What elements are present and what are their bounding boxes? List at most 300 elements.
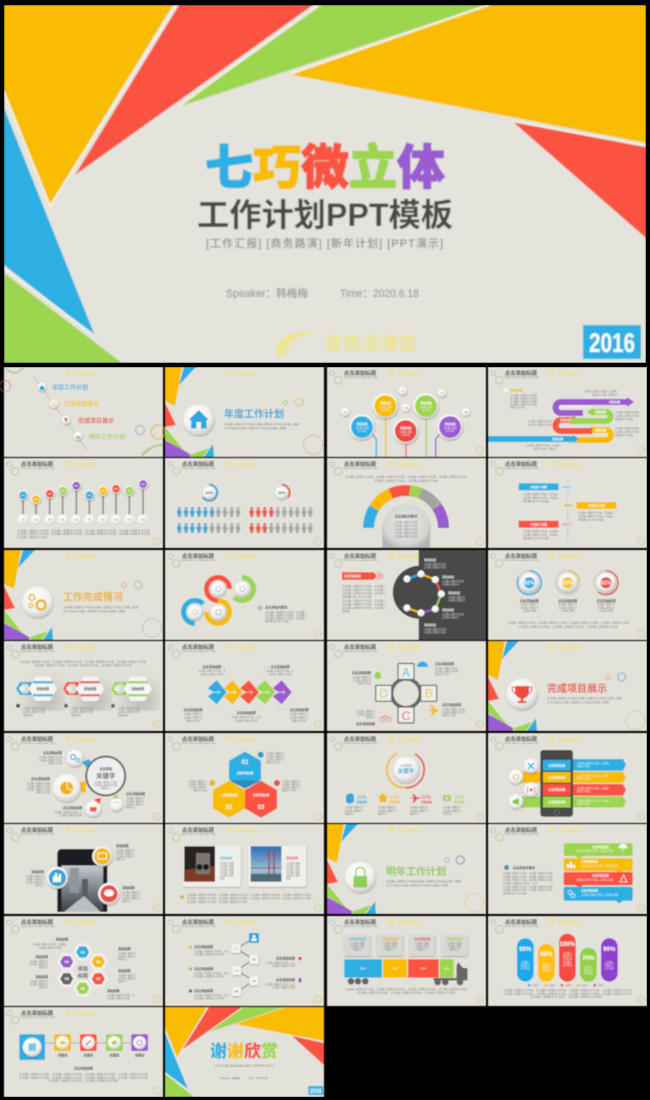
cargo blocks bbox=[344, 959, 454, 978]
chevron row bbox=[208, 680, 292, 704]
hexagon 03 bbox=[245, 781, 277, 818]
agenda item 3: 完成项目展示 bbox=[78, 417, 114, 425]
slide: chevrons: 变色龙课堂 bbox=[235, 644, 258, 651]
closing triangles bbox=[165, 1007, 324, 1097]
slide: arch gauge: 变色龙课堂 bbox=[397, 461, 420, 468]
right arrow bars: 简要文字内容 bbox=[577, 802, 591, 806]
phone: 点击添加标题 bbox=[548, 776, 565, 780]
slide: photo cards bbox=[165, 824, 324, 914]
slide: three hexagons bbox=[165, 733, 324, 823]
center disc: 点击添加关键词 bbox=[395, 514, 417, 518]
main title bbox=[205, 141, 445, 195]
captions: 简要文字内容 bbox=[48, 761, 63, 765]
ring 23%: 点击输入简要文字 bbox=[559, 605, 578, 609]
slide: timeline: Click here to add your title bbox=[505, 467, 539, 470]
captions bbox=[30, 936, 137, 1000]
capsule 100% red: 点击输入 bbox=[563, 951, 572, 955]
side captions: 点击输入简要文字内容 bbox=[528, 422, 553, 426]
month discs: 7月 bbox=[88, 518, 91, 522]
hexagon 02: 02 bbox=[226, 805, 233, 811]
callouts: 点击输入简要文字内容 bbox=[269, 672, 292, 676]
side captions: 简要文字内容，简要文字 bbox=[592, 392, 619, 396]
right labels bbox=[424, 557, 466, 634]
captions: 点击输入简要文字 bbox=[189, 782, 208, 786]
info cards: 简要文字 bbox=[417, 947, 427, 951]
capsule 100% red: 文字内容 bbox=[563, 957, 572, 961]
slide: swirl rings: 变色龙课堂 bbox=[235, 553, 258, 560]
bubble: blue: 添加标题 bbox=[356, 422, 368, 426]
main title: 微 bbox=[301, 142, 349, 195]
phone body bbox=[57, 849, 107, 912]
card: camera photo bbox=[183, 846, 241, 887]
hex center label: 标题 bbox=[78, 972, 89, 980]
captions: 点击输入简要文字 bbox=[30, 982, 49, 986]
captions: 点击添加标题 bbox=[356, 721, 376, 726]
stat: 16%: 16% bbox=[356, 795, 367, 801]
captions: 点击输入简要文字内容 bbox=[39, 755, 63, 759]
slide: keyword lens: Click here to add your title bbox=[21, 742, 55, 745]
section text bbox=[224, 422, 300, 430]
stat: 10%: 点击输入简要文字 bbox=[443, 808, 462, 812]
pins: 20% bbox=[34, 499, 38, 501]
arrow band: purple: 添加标题 bbox=[609, 400, 620, 404]
icon discs bbox=[509, 759, 538, 809]
slide: phone menu: 点击添加标题 bbox=[505, 735, 538, 743]
side captions: 点击输入简要文字内容 bbox=[615, 414, 640, 418]
captions: 点击输入简要文字 bbox=[118, 954, 137, 958]
bubble: purple: 添加标题 bbox=[444, 422, 456, 426]
cover: blue triangle bbox=[4, 108, 95, 336]
right arrow bars: 简要文字内容 bbox=[577, 789, 591, 793]
captions: 简要文字内容 bbox=[435, 672, 449, 676]
card: camera photo: 点击输入简要 bbox=[220, 861, 234, 865]
right labels: 点击输入简要文字 bbox=[442, 615, 460, 619]
captions: 点击输入简要文字 bbox=[282, 782, 301, 786]
colored hexes: 03 bbox=[96, 976, 101, 981]
left text: 点击输入简要文字内容，点击输入 bbox=[342, 598, 387, 602]
flow boxes: 03 bbox=[235, 968, 239, 972]
pins: 50% bbox=[141, 484, 145, 486]
bubble: red: 文字内容 bbox=[401, 432, 411, 436]
slide: agenda bbox=[0, 367, 165, 457]
slide: chevrons: 点击添加标题 bbox=[182, 643, 215, 651]
slide: capsule chart bbox=[488, 916, 647, 1006]
hex group 02: 添加标题 bbox=[84, 686, 97, 691]
ring 82%: 点击添加标题 bbox=[520, 598, 540, 603]
process tile: purple: 关键词 bbox=[135, 1052, 144, 1057]
slide: swirl rings: Click here to add your title bbox=[182, 559, 216, 562]
closing title: 赏 bbox=[261, 1041, 278, 1061]
slide: work completion section bbox=[4, 550, 163, 640]
info cards: 点击输入简要 bbox=[415, 944, 430, 948]
pins: 20% bbox=[101, 491, 105, 493]
captions: 添加标题 bbox=[122, 885, 136, 890]
ring 23%: 点击输入简要 bbox=[561, 609, 575, 613]
slide: timeline: 点击添加标题 bbox=[505, 460, 538, 468]
connectors bbox=[78, 759, 119, 804]
step captions: 点击添加标题 bbox=[276, 977, 296, 982]
body text bbox=[17, 528, 151, 539]
info cards: 点击输入简要 bbox=[350, 941, 365, 945]
callouts: 点击添加标题 bbox=[236, 710, 256, 715]
closing speaker bbox=[220, 1076, 269, 1080]
card: bridge photo: 点击输入简要 bbox=[286, 864, 300, 868]
capsule 70% green: 简要文字 bbox=[584, 968, 593, 972]
side captions: 简要文字内容，简要文字 bbox=[533, 446, 558, 450]
capsule 80% yellow bbox=[538, 944, 555, 982]
captions: 简要文字内容 bbox=[357, 681, 372, 685]
icon: gears bbox=[22, 587, 53, 618]
left text bbox=[342, 584, 387, 613]
dark panel bbox=[393, 550, 486, 640]
callouts: 点击输入简要文字内容 bbox=[200, 672, 224, 676]
process tile: red bbox=[80, 1034, 97, 1057]
pins: 30% bbox=[48, 494, 52, 496]
step captions: 点击输入简要文字内容，点击 bbox=[194, 993, 230, 997]
slide: people chart: Click here to add your title bbox=[182, 467, 216, 470]
right labels: 添加标题 bbox=[424, 557, 436, 562]
captions: 添加标题 bbox=[56, 936, 69, 942]
slide: phone photo: Click here to add your title bbox=[21, 833, 55, 836]
captions: 简要文字 bbox=[39, 965, 49, 969]
timeline item yellow: 点击输入标题 bbox=[588, 504, 605, 508]
agenda item 1: 年度工作计划 bbox=[52, 384, 88, 392]
slide: speech blocks: 变色龙课堂 bbox=[558, 827, 581, 834]
slide: hexagon tags: Click here to add your title bbox=[21, 650, 55, 653]
slide: truck chart bbox=[327, 916, 486, 1006]
footer text bbox=[507, 620, 630, 628]
captions: 点击添加标题 bbox=[442, 702, 462, 707]
slide: flow steps: 变色龙课堂 bbox=[235, 919, 258, 926]
tile D: D bbox=[379, 687, 388, 701]
slide: chevrons bbox=[165, 641, 324, 731]
step captions: 点击输入简要文字内容，点击 bbox=[194, 971, 230, 975]
slide: dark circle: Click here to add your title bbox=[344, 559, 378, 562]
captions: 点击输入简要文字内容，点 bbox=[107, 993, 135, 997]
captions bbox=[189, 751, 301, 792]
captions: 点击输入简要文字内容 bbox=[71, 706, 94, 710]
number tags bbox=[341, 387, 470, 416]
slide: flow steps: Click here to add your title bbox=[182, 925, 216, 928]
hex group 02 bbox=[63, 677, 104, 701]
tile B: B bbox=[425, 687, 433, 701]
closing title: 欣 bbox=[244, 1041, 261, 1061]
card: camera photo: 添加标题 bbox=[220, 855, 232, 860]
section text: 文字内容点击输入简要文字内容点击输入简要 bbox=[63, 609, 126, 613]
captions: 简要文字 bbox=[39, 985, 49, 989]
left text: 点击输入简要文字内容，点击输入简要文字内容 bbox=[503, 874, 553, 878]
donut 35% bbox=[274, 485, 290, 501]
slide: gauge with stats: 点击添加标题 bbox=[344, 735, 377, 743]
captions: 点击输入简要文字 bbox=[26, 880, 45, 884]
slide: gauge with stats: 变色龙课堂 bbox=[397, 736, 420, 743]
slide: project showcase section bbox=[488, 641, 647, 731]
captions: 点击输入简要文字内容 bbox=[59, 813, 83, 817]
hexagon 01: 点击添加标题 bbox=[237, 771, 254, 775]
colored hexes: 01 bbox=[80, 950, 86, 954]
flow boxes: 04 bbox=[252, 979, 256, 983]
flow boxes bbox=[232, 933, 259, 996]
captions: 点击输入简要文字内容 bbox=[442, 707, 466, 711]
ring 82%: 82% bbox=[524, 581, 535, 587]
bubble: green: 点击输入简要 bbox=[419, 404, 433, 408]
section text bbox=[386, 879, 462, 887]
lens: 点击输入简要文字内容 bbox=[94, 783, 118, 787]
captions: 添加标题 bbox=[116, 843, 130, 848]
stat: 10% bbox=[443, 795, 465, 816]
slide: dark circle: 点击添加标题 bbox=[344, 552, 377, 560]
captions: 添加标题 bbox=[35, 954, 49, 959]
main title: 巧 bbox=[253, 142, 301, 195]
closing title: 谢 bbox=[210, 1041, 227, 1061]
footer text bbox=[180, 893, 312, 903]
tile C bbox=[398, 707, 414, 723]
info cards: 点击输入简要 bbox=[447, 944, 462, 948]
stat: 10%: 10% bbox=[454, 795, 465, 801]
cargo blocks: 15% bbox=[392, 966, 398, 970]
process tile: green: 关键词 bbox=[110, 1052, 119, 1057]
footer text: 点击输入简要文字内容，点击输入简要文字内容，点击输入简要文字内容，点击输入简要文字内容 bbox=[503, 988, 633, 992]
gauge bbox=[387, 754, 424, 788]
cover: green triangle bbox=[178, 5, 486, 107]
bubble: purple bbox=[437, 414, 463, 440]
process tile: purple bbox=[131, 1034, 148, 1057]
pins: 50% bbox=[74, 486, 79, 488]
captions: 点击输入简要文字 bbox=[353, 678, 372, 682]
icon: cloud bbox=[417, 662, 428, 667]
closing speaker: Speaker：韩梅梅 bbox=[220, 1076, 241, 1080]
callouts: 简要文字内容 bbox=[292, 718, 307, 722]
captions: 点击输入简要文字内容 bbox=[27, 787, 51, 791]
captions: 点击输入简要文字 bbox=[30, 962, 49, 966]
ring 61% bbox=[594, 571, 618, 613]
captions: 点击输入简要文字 bbox=[30, 959, 49, 963]
stems bbox=[23, 486, 143, 516]
captions: 点击输入简要文字 bbox=[122, 896, 141, 900]
block: yellow: 点击输入简要文字内容，点击输入简要 bbox=[581, 864, 619, 868]
flow boxes: 02 bbox=[252, 958, 256, 962]
stat: 16% bbox=[345, 793, 368, 816]
slide: icon process: 变色龙课堂 bbox=[74, 1010, 97, 1017]
captions: 点击输入简要文字 bbox=[118, 973, 137, 977]
captions: 点击输入简要文字内容 bbox=[23, 710, 46, 714]
slide: gauge with stats bbox=[327, 733, 486, 823]
slide: keyword lens bbox=[4, 733, 163, 823]
timeline item yellow: 2020.02 bbox=[564, 506, 573, 508]
ring arcs bbox=[184, 577, 254, 624]
info cards: 简要文字 bbox=[353, 947, 363, 951]
bubble: blue bbox=[349, 414, 375, 440]
right labels: 点击输入简要文字 bbox=[448, 595, 466, 599]
slide: photo cards: 变色龙课堂 bbox=[235, 827, 258, 834]
text: upper left: 点击输入简要文字内容 bbox=[510, 393, 538, 397]
captions: 添加标题 bbox=[118, 946, 132, 951]
arrow band: green bbox=[570, 408, 610, 421]
center ring bbox=[392, 679, 420, 708]
top text: 点击输入简要文字内容，点击输入简要文字内容 bbox=[374, 478, 439, 482]
phone: 点击添加标题 bbox=[548, 764, 565, 768]
process tile: red: 关键词 bbox=[84, 1052, 93, 1057]
info cards: 点击输入简要 bbox=[383, 941, 398, 945]
hexagon 01 bbox=[229, 752, 261, 788]
section heading: 工作完成情况 bbox=[63, 591, 123, 604]
slide: three hexagons: 点击添加标题 bbox=[182, 735, 215, 743]
captions: 点击添加标题 bbox=[126, 791, 146, 796]
capsule 70% green bbox=[580, 948, 597, 982]
icon: lock bbox=[345, 862, 376, 893]
truck bbox=[348, 962, 468, 985]
slide: people chart bbox=[165, 458, 324, 548]
callouts: 点击添加标题 bbox=[270, 664, 290, 669]
cargo blocks: 10% bbox=[444, 966, 450, 970]
pins: 30% bbox=[114, 489, 118, 491]
capsule 100% red: 简要文字 bbox=[563, 954, 572, 958]
month discs: 1月 bbox=[21, 518, 25, 522]
text: upper left: 点击输入简要文字内容 bbox=[510, 396, 538, 400]
arrow band: blue: 添加标题 bbox=[552, 437, 563, 441]
side captions: 简要文字内容 bbox=[615, 417, 634, 421]
footer text bbox=[345, 987, 468, 995]
top text: 点击输入简要文字内容，点击输入简要文字内容，点击输入简要文字内容，点击输入简要文字内容 bbox=[345, 474, 468, 478]
slide: arch gauge bbox=[327, 458, 486, 548]
capsule 90% blue bbox=[517, 938, 534, 982]
slide: people chart: 变色龙课堂 bbox=[235, 461, 258, 468]
closing tags: [工作汇报] [商务路演] [新年计划] [PPT演示] bbox=[215, 1064, 273, 1068]
captions: 点击输入简要文字内容 bbox=[27, 781, 51, 785]
card: camera photo: 点击输入简要 bbox=[220, 873, 234, 877]
slide: hexagon tags: 点击添加标题 bbox=[21, 643, 54, 651]
center disc: 点击输入简要文字内容 bbox=[395, 527, 418, 531]
captions bbox=[26, 843, 141, 903]
arch segments bbox=[368, 490, 444, 528]
left text: 点击输入简要文字内容，点击输入简要文字内容 bbox=[503, 888, 553, 892]
stat: 12%: 点击输入简要文字 bbox=[378, 805, 397, 809]
captions: 简要文字内容 bbox=[442, 713, 456, 717]
step captions: 点击输入简要文字内容，点击 bbox=[265, 960, 296, 964]
card: bridge photo: 添加标题 bbox=[286, 855, 298, 860]
right arrow bars: 简要文字内容 bbox=[577, 764, 591, 768]
slide: speech blocks: Click here to add your title bbox=[505, 833, 539, 836]
body text: 点击输入简要文字内容，点击输入简要文字内容，点击输入简要文字内容，点击输入简要文字内容 bbox=[17, 528, 151, 532]
captions: 添加标题 bbox=[107, 988, 121, 993]
left text: 简要文字内容 bbox=[503, 891, 528, 895]
process tile: yellow bbox=[54, 1034, 71, 1057]
text: upper left: 点击输入简要文字内容 bbox=[510, 402, 538, 406]
tile B bbox=[421, 685, 437, 701]
slide: three rings: 点击添加标题 bbox=[505, 552, 538, 560]
ring 61%: 点击添加标题 bbox=[596, 598, 616, 603]
captions: 简要文字 bbox=[118, 979, 128, 983]
people: red rows bbox=[249, 507, 313, 533]
disc: yellow bbox=[92, 846, 113, 866]
arrow band: purple bbox=[556, 397, 634, 413]
slide: ABCD cross: 变色龙课堂 bbox=[397, 644, 420, 651]
captions: 点击输入简要文字 bbox=[189, 779, 208, 783]
timeline item yellow bbox=[560, 502, 616, 522]
agenda item 3 bbox=[62, 416, 114, 425]
hexagon 03: 03 bbox=[258, 805, 265, 811]
logo: 变色龙课堂 bbox=[324, 333, 417, 354]
slide: hexagon tags: 变色龙课堂 bbox=[74, 644, 97, 651]
donut 65%: 65% bbox=[205, 491, 214, 495]
hex group 03 bbox=[111, 677, 152, 701]
callouts: 点击添加标题 bbox=[183, 707, 203, 712]
hex group 03: 添加标题 bbox=[131, 686, 145, 691]
phone bbox=[540, 750, 573, 817]
slide: gauge with stats: Click here to add your title bbox=[344, 742, 378, 745]
captions: 点击输入简要文字 bbox=[189, 785, 208, 789]
slide: truck chart: 点击添加标题 bbox=[344, 918, 377, 926]
slide: next year plan section bbox=[327, 824, 486, 914]
capsule 80% yellow: 点击输入 bbox=[542, 962, 551, 966]
body text: 点击输入简要文字内容，点击输入简要文字内容，点击输入简要文字内容，点击输入简要文字内容 bbox=[17, 532, 151, 536]
left text: 简要文字内容 bbox=[342, 594, 373, 598]
red tag: 点击添加标题 bbox=[344, 574, 361, 578]
captions: 点击输入简要文字 bbox=[122, 890, 141, 894]
bubble: green bbox=[413, 393, 439, 419]
callout: 点击输入简要文字内容，点击输入 bbox=[265, 616, 308, 620]
callout bbox=[258, 605, 308, 623]
info cards: 点击输入简要 bbox=[447, 941, 462, 945]
capsule 90% blue: 简要文字 bbox=[521, 963, 530, 967]
slide: bubble tree: Click here to add your title bbox=[344, 376, 378, 379]
right arrow bars: 点击输入简要文字内容，点击输入 bbox=[577, 761, 611, 765]
card: bridge photo bbox=[248, 846, 306, 887]
capsule 90% purple: 90% bbox=[603, 947, 616, 953]
step captions: 点击输入简要文字内容 bbox=[194, 952, 225, 956]
right labels: 点击输入简要文字内容 bbox=[424, 565, 447, 569]
captions: 点击输入简要文字 bbox=[116, 851, 135, 855]
section heading: 明年工作计划 bbox=[386, 865, 446, 878]
slide: truck chart: Click here to add your title bbox=[344, 925, 378, 928]
slide: pin chart bbox=[4, 458, 163, 548]
cover: right yellow polygon bbox=[288, 5, 646, 143]
stat: 32%: 32% bbox=[421, 795, 432, 801]
stat: 12%: 12% bbox=[389, 795, 400, 801]
side captions: 点击输入简要文字内容 bbox=[615, 426, 640, 430]
slide: three hexagons: Click here to add your title bbox=[182, 742, 216, 745]
step captions: 点击输入简要文字内容 bbox=[272, 985, 296, 989]
timeline item yellow: 简要文字内容 bbox=[578, 518, 605, 522]
gauge: 点击添加 bbox=[400, 764, 412, 768]
month discs: 10月 bbox=[114, 518, 118, 522]
slide: ABCD cross: Click here to add your title bbox=[344, 650, 378, 653]
left text: 点击输入简要文字内容，点击 bbox=[503, 881, 539, 885]
flow boxes: 05 bbox=[235, 990, 239, 994]
callout: 点击输入简要文字内容，点击输入 bbox=[265, 613, 308, 617]
side captions: 简要文字内容 bbox=[615, 433, 634, 437]
info cards: 点击添加标题 bbox=[382, 937, 399, 941]
slide: pin chart: 变色龙课堂 bbox=[74, 461, 97, 468]
side captions: 点击输入简要文字内容，点击输入 bbox=[526, 443, 562, 447]
legend: 关键词 bbox=[565, 983, 571, 987]
right labels: 点击输入简要文字内容 bbox=[442, 612, 465, 616]
capsule 90% purple: 文字内容 bbox=[605, 966, 614, 970]
agenda item 4: 明年工作计划 bbox=[89, 433, 125, 441]
tile A bbox=[398, 664, 414, 680]
slide: pin chart: 点击添加标题 bbox=[21, 460, 54, 468]
timeline item red: 简要文字内容 bbox=[523, 536, 550, 540]
slide: phone menu bbox=[488, 733, 647, 823]
legend: 关键词 bbox=[532, 983, 539, 987]
side captions: 点击输入简要文字内容 bbox=[615, 410, 640, 414]
agenda item 2: 工作完成情况 bbox=[63, 400, 99, 408]
left text: 点击输入简要文字内容，点击输入 bbox=[342, 602, 387, 606]
hex group 02: 02 bbox=[66, 686, 72, 692]
cover: top-left yellow triangle bbox=[4, 5, 173, 205]
footer text: 点击输入简要文字内容，点击输入简要文字内容，点击输入简要文字内容，点击输入简要文字内容 bbox=[503, 991, 633, 995]
ring 61%: 点击输入简要文字 bbox=[597, 605, 616, 609]
